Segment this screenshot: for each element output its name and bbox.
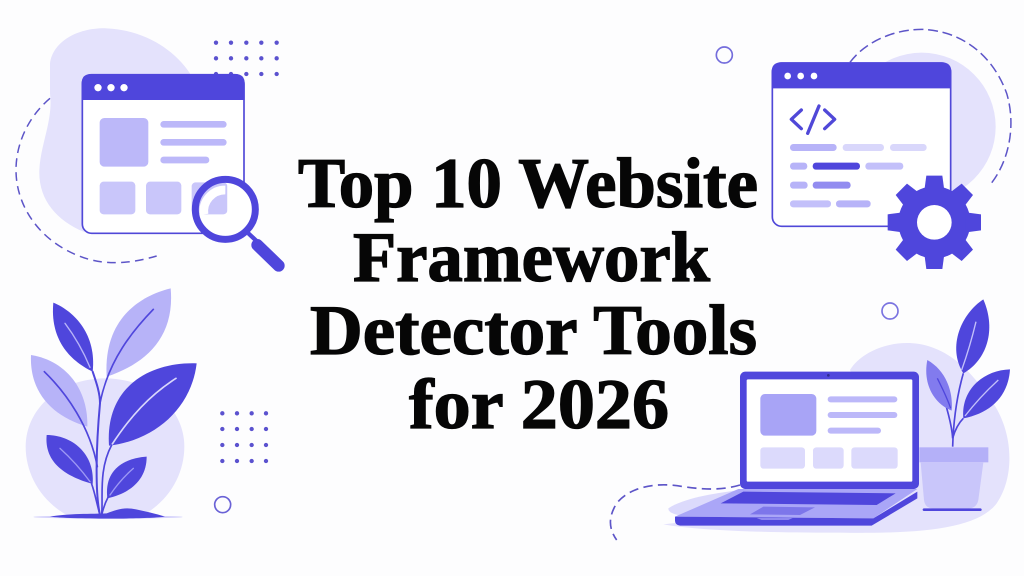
background blob — [663, 343, 1009, 533]
front edge — [675, 492, 917, 526]
background circle — [848, 53, 996, 201]
code window — [772, 62, 951, 226]
illustration: laptop with potted plant — [610, 299, 1010, 540]
background blob — [39, 28, 190, 233]
dot grid — [214, 40, 279, 76]
decorative small ring — [882, 303, 898, 319]
title — [298, 145, 758, 444]
icon: magnifying glass — [195, 179, 279, 266]
icon: code brackets — [791, 106, 835, 133]
ground shadow — [33, 515, 183, 519]
laptop screen — [740, 372, 919, 489]
title: Detector Tools — [310, 292, 757, 370]
screen content — [760, 394, 898, 469]
dot grid — [220, 411, 268, 463]
decorative small ring — [716, 47, 732, 63]
plant stems — [937, 373, 963, 447]
dashed arc — [850, 29, 1011, 186]
plant leaves — [926, 299, 1010, 418]
background circle — [26, 378, 184, 515]
illustration: code window with gear — [716, 29, 1011, 269]
code lines — [790, 144, 927, 207]
ground mound — [50, 508, 165, 519]
leaf: middle left light — [31, 355, 87, 427]
laptop base top — [675, 489, 917, 518]
plant pot — [919, 447, 988, 511]
leaf: upper right light — [106, 288, 171, 377]
decorative small ring — [215, 497, 231, 513]
leaf: lower left dark — [46, 435, 93, 484]
illustration: browser window with magnifier — [16, 28, 279, 266]
potted plant — [919, 299, 1010, 511]
trackpad — [750, 507, 815, 515]
title: for 2026 — [409, 366, 669, 444]
keyboard — [721, 492, 896, 505]
leaf: upper left dark — [53, 303, 93, 372]
icon: gear — [888, 176, 981, 269]
dashed curve — [610, 485, 740, 540]
title: Framework — [353, 219, 710, 297]
laptop — [675, 372, 919, 526]
leaf: large right dark — [109, 363, 197, 446]
dashed arc — [16, 98, 157, 263]
illustration: leafy plant — [26, 288, 268, 519]
stems and veins — [44, 309, 176, 515]
browser window — [82, 74, 245, 233]
title: Top 10 Website — [298, 145, 758, 223]
soft shape behind laptop — [668, 490, 740, 520]
leaf: lower right dark — [107, 457, 147, 498]
